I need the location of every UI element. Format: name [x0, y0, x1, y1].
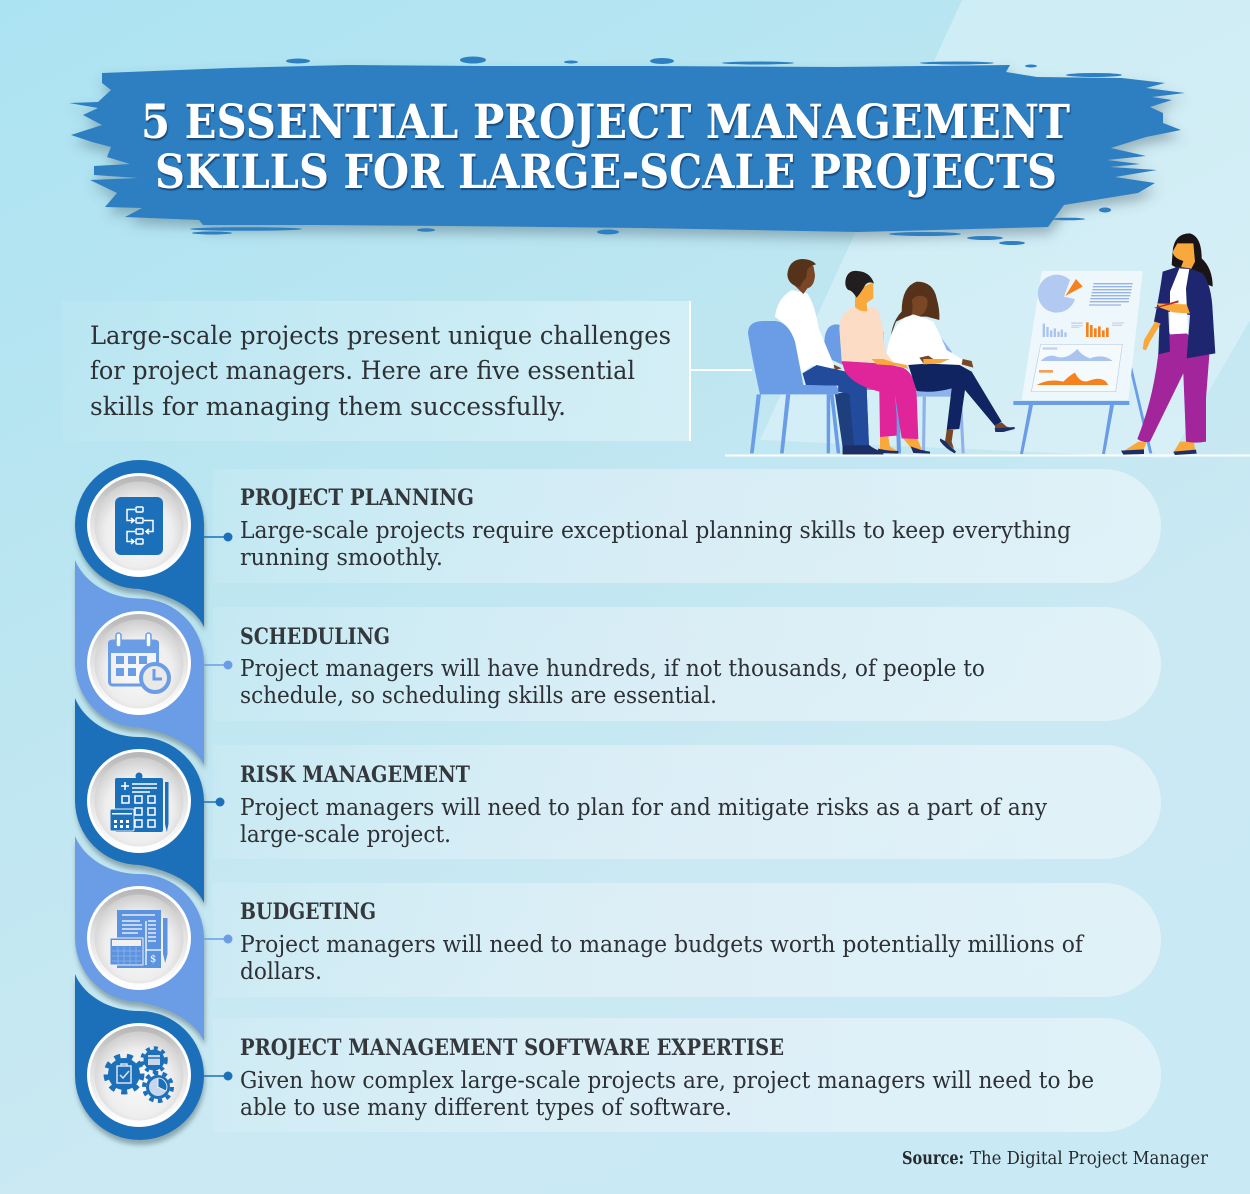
icon 4: invoice and calculator: $	[150, 954, 156, 965]
man's lower leg	[835, 394, 854, 448]
connector dots	[204, 532, 232, 1080]
row 3 panel: risk management: Project managers will need to plan for and mitigate risks as a part of any	[240, 795, 1047, 821]
chair 3	[917, 338, 965, 453]
row 5 panel: software expertise: Given how complex large-scale projects are, project managers will need to be	[240, 1068, 1094, 1094]
panel: intro	[62, 301, 752, 441]
row 3 panel: risk management	[213, 745, 1161, 859]
row 1 panel: project planning: running smoothly.	[240, 545, 443, 571]
source line: The Digital Project Manager	[970, 1149, 1209, 1169]
woman in pink	[839, 271, 930, 454]
intro text	[90, 321, 671, 422]
row 4 panel: budgeting: dollars.	[240, 959, 322, 985]
icon 5: gears	[87, 1023, 191, 1127]
timeline ribbon	[75, 460, 204, 1140]
row 4 panel: budgeting: Project managers will need to manage budgets worth potentially millions of	[240, 932, 1084, 958]
source line: Source:	[902, 1149, 964, 1169]
row 4 panel: budgeting	[213, 883, 1161, 997]
man's leg over chair	[803, 365, 869, 447]
chair 2	[824, 324, 901, 453]
row 2 panel: scheduling: schedule, so scheduling skills are essential.	[240, 683, 717, 709]
board area charts	[1031, 344, 1122, 392]
icon 1: process flow	[87, 473, 191, 577]
row 1 panel: project planning	[213, 469, 1161, 583]
illustration: team watching a presentation	[725, 233, 1250, 456]
row 1 panel: project planning: Large-scale projects require exceptional planning skills to keep everything	[240, 518, 1071, 544]
chair 1	[748, 321, 840, 453]
title text: SKILLS FOR LARGE-SCALE PROJECTS	[155, 144, 1057, 199]
presenter	[1121, 233, 1215, 455]
row 2 panel: scheduling: SCHEDULING	[240, 624, 390, 650]
row 2 panel: scheduling: Project managers will have hundreds, if not thousands, of people to	[240, 656, 985, 682]
board pie chart	[1038, 275, 1083, 313]
icon 3: clipboard and calendar	[87, 749, 191, 853]
row 1 panel: project planning: PROJECT PLANNING	[240, 485, 474, 511]
man's shoe	[843, 445, 883, 454]
title text: 5 ESSENTIAL PROJECT MANAGEMENT	[141, 94, 1070, 149]
row 5 panel: software expertise	[213, 1018, 1161, 1132]
row 5 panel: software expertise: PROJECT MANAGEMENT SOFTWARE EXPERTISE	[240, 1035, 784, 1061]
title text	[141, 94, 1070, 199]
intro text: skills for managing them successfully.	[90, 392, 566, 422]
row 3 panel: risk management: large-scale project.	[240, 822, 451, 848]
intro text: for project managers. Here are five essential	[90, 356, 635, 386]
row 2 panel: scheduling	[213, 607, 1161, 721]
woman in white	[887, 282, 1015, 453]
title banner: brush stroke	[69, 56, 1185, 245]
man	[775, 259, 883, 454]
row 5 panel: software expertise: able to use many different types of software.	[240, 1095, 732, 1121]
icon 2: calendar with clock	[87, 611, 191, 715]
presentation board	[1013, 271, 1152, 454]
board bar charts	[1043, 324, 1067, 337]
row 4 panel: budgeting: BUDGETING	[240, 899, 376, 925]
intro text: Large-scale projects present unique challenges	[90, 321, 671, 351]
row 3 panel: risk management: RISK MANAGEMENT	[240, 762, 471, 788]
icon 4: invoice and calculator	[87, 886, 191, 990]
